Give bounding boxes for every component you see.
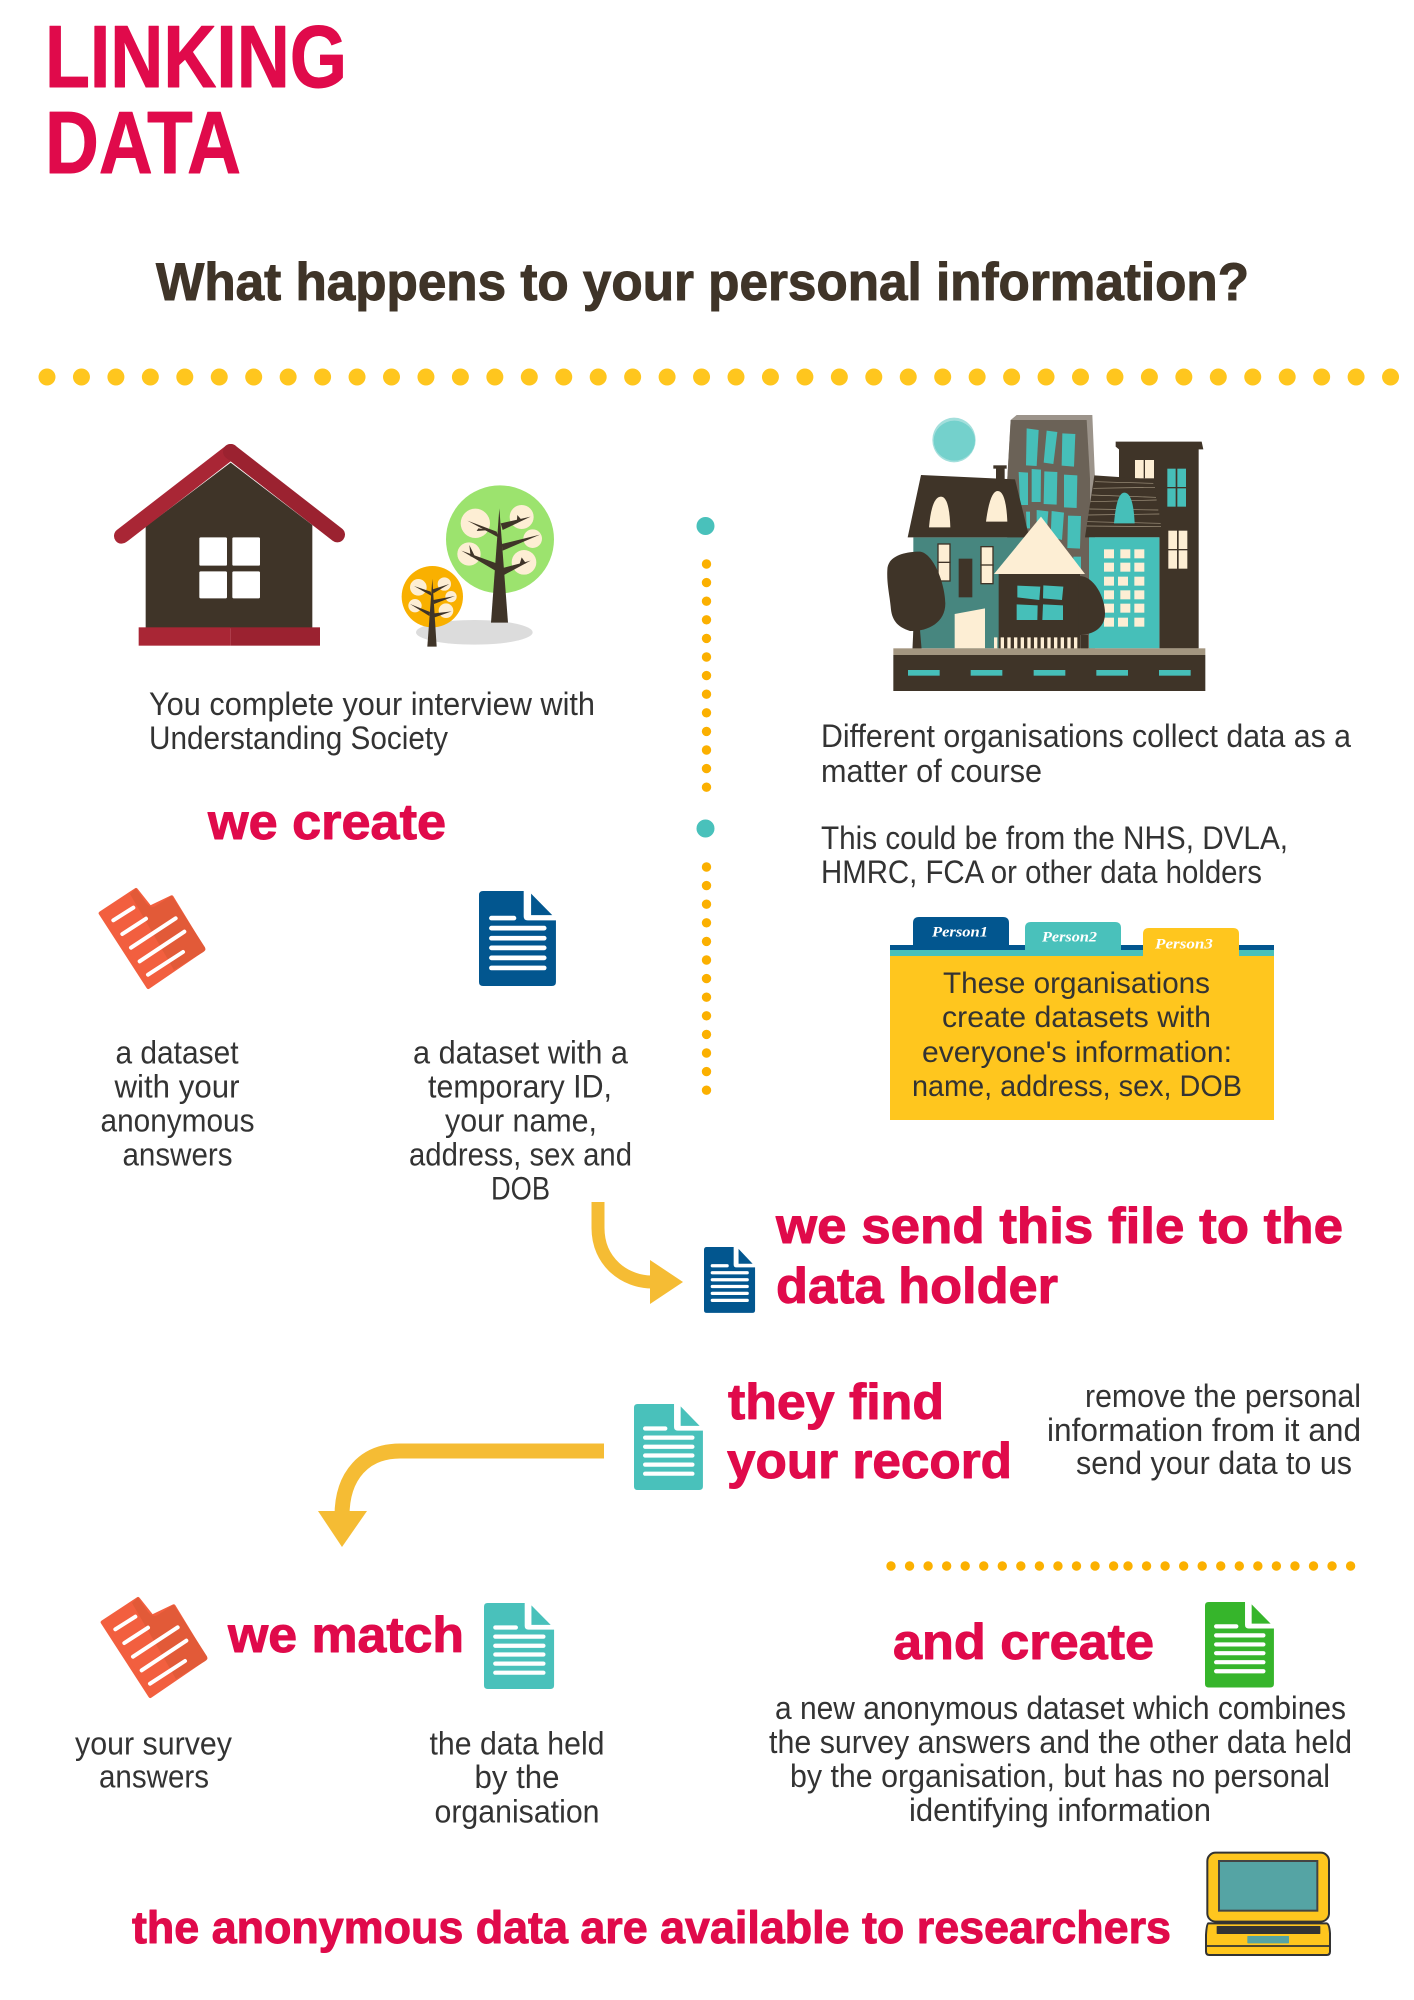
icon: orange dataset: [101, 888, 205, 987]
text: organisations collect data: This could be from the NHS, DVLA,: [821, 820, 1288, 856]
panel: folder: [890, 917, 1274, 1120]
text: data held by organisation: [430, 1726, 604, 1830]
folder text: [912, 967, 1242, 1103]
text: data held by organisation: by the: [474, 1759, 560, 1795]
text: organisations collect data: [821, 718, 1351, 890]
icon: teal file, organisation data: [484, 1603, 554, 1689]
icon: city: [887, 415, 1205, 691]
text: new anonymous dataset: identifying information: [909, 1792, 1211, 1828]
heading: they find your record: your record: [727, 1433, 1012, 1489]
text: temporary ID dataset: your name,: [445, 1102, 597, 1138]
tab: Person1: Person1: [932, 924, 988, 940]
text: organisations collect data: Different organisations collect data as a: [821, 718, 1351, 754]
text: anonymous answers dataset: with your: [114, 1068, 240, 1104]
text: anonymous answers dataset: [100, 1034, 254, 1172]
text: interview: You complete your interview with: [149, 686, 595, 722]
text: new anonymous dataset: the survey answers and the other data held: [769, 1724, 1352, 1760]
text: data held by organisation: the data held: [430, 1726, 604, 1762]
folder text: name, address, sex, DOB: [912, 1070, 1242, 1103]
heading: they find your record: [727, 1374, 1012, 1489]
text: temporary ID dataset: [409, 1034, 632, 1206]
heading: we send this file: data holder: [776, 1258, 1058, 1314]
text: data held by organisation: organisation: [434, 1794, 600, 1830]
arrow: to data holder: [598, 1202, 683, 1304]
arrow: to match: [318, 1451, 604, 1547]
text: temporary ID dataset: a dataset with a: [413, 1034, 628, 1070]
title: DATA: [45, 93, 241, 192]
text: your survey answers: answers: [99, 1758, 209, 1794]
text: organisations collect data: matter of course: [821, 753, 1042, 789]
text: your survey answers: your survey: [75, 1726, 232, 1762]
icon: orange dataset, survey answers: [103, 1597, 207, 1696]
heading: we send this file: [775, 1198, 1343, 1314]
text: temporary ID dataset: address, sex and: [409, 1136, 632, 1172]
text: temporary ID dataset: DOB: [491, 1170, 550, 1206]
heading: we match: we match: [227, 1607, 464, 1663]
text: temporary ID dataset: temporary ID,: [428, 1068, 612, 1104]
text: remove personal information: information from it and: [1047, 1412, 1361, 1448]
timeline dots: [696, 517, 714, 1092]
text: new anonymous dataset: [769, 1690, 1352, 1828]
text: interview: [149, 686, 595, 756]
icon: green file: [1205, 1602, 1274, 1687]
tab: Person3: [1143, 928, 1239, 956]
icon: house: [122, 452, 337, 646]
tab: Person3: Person3: [1155, 936, 1214, 952]
text: new anonymous dataset: a new anonymous dataset which combines: [775, 1690, 1346, 1726]
text: interview: Understanding Society: [149, 720, 448, 756]
text: your survey answers: [75, 1726, 232, 1794]
text: new anonymous dataset: by the organisation, but has no personal: [790, 1758, 1330, 1794]
text: anonymous answers dataset: answers: [122, 1136, 232, 1172]
icon: teal file: [634, 1404, 703, 1490]
folder text: everyone's information:: [922, 1036, 1232, 1069]
text: remove personal information: remove the personal: [1085, 1378, 1361, 1414]
subtitle: What happens to your personal information?: [156, 253, 1249, 312]
tab: Person2: [1025, 922, 1121, 950]
icon: blue dataset: [479, 891, 556, 986]
icon: trees: [402, 485, 554, 647]
heading: and create: and create: [893, 1614, 1154, 1670]
icon: laptop: [1206, 1853, 1330, 1955]
title: [45, 7, 347, 192]
text: anonymous answers dataset: a dataset: [116, 1034, 239, 1070]
folder text: create datasets with: [942, 1001, 1211, 1034]
text: organisations collect data: HMRC, FCA or other data holders: [821, 854, 1262, 890]
heading: available to researchers: the anonymous data are available to researchers: [132, 1902, 1171, 1953]
tab: Person1: [913, 917, 1009, 950]
folder text: These organisations: [943, 967, 1210, 1000]
text: remove personal information: [1047, 1378, 1361, 1481]
text: remove personal information: send your data to us: [1076, 1445, 1352, 1481]
tab: Person2: Person2: [1042, 930, 1098, 946]
title: LINKING: [45, 7, 347, 106]
heading: we create: we create: [207, 794, 446, 850]
icon: blue file: [704, 1247, 755, 1313]
heading: we send this file: we send this file to the: [775, 1198, 1343, 1254]
heading: they find your record: they find: [728, 1374, 944, 1430]
text: anonymous answers dataset: anonymous: [100, 1102, 254, 1138]
